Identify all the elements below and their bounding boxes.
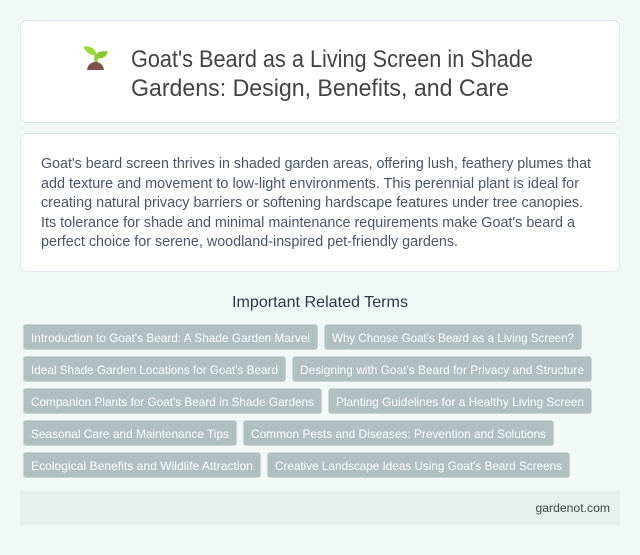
tag: companion plants: Companion Plants for Goat's Beard in Shade Gardens	[31, 395, 314, 409]
title: Gardens: Design, Benefits, and Care	[131, 75, 509, 102]
title	[131, 46, 533, 102]
icon: seedling	[84, 46, 108, 70]
text block: description: creating natural privacy barriers or softening hardscape features under tree canopies.	[41, 195, 583, 211]
tag: planting guidelines: Planting Guidelines for a Healthy Living Screen	[336, 395, 584, 409]
text block: description	[41, 156, 591, 250]
footer	[20, 491, 620, 525]
tag group: related terms	[24, 324, 592, 478]
tag: pests and diseases	[244, 420, 554, 446]
tag: planting guidelines	[328, 388, 592, 414]
tag: why choose: Why Choose Goat's Beard as a Living Screen?	[332, 331, 574, 345]
text block: description: perfect choice for serene, woodland-inspired pet-friendly gardens.	[41, 234, 458, 250]
tag: creative ideas: Creative Landscape Ideas Using Goat's Beard Screens	[275, 459, 562, 473]
tag: introduction: Introduction to Goat's Beard: A Shade Garden Marvel	[31, 331, 310, 345]
tag: introduction	[24, 324, 318, 350]
title: Goat's Beard as a Living Screen in Shade	[131, 46, 533, 73]
tag: why choose	[324, 324, 582, 350]
tag: ecological benefits: Ecological Benefits and Wildlife Attraction	[31, 459, 253, 473]
tag: creative ideas	[268, 452, 570, 478]
footer text: gardenot.com	[536, 501, 610, 515]
tag: seasonal care	[24, 420, 236, 446]
text block: description: Its tolerance for shade and minimal maintenance requirements make Goat's beard a	[41, 215, 575, 231]
panel: description	[20, 134, 620, 272]
tag: pests and diseases: Common Pests and Diseases: Prevention and Solutions	[251, 427, 546, 441]
tag: ecological benefits	[24, 452, 260, 478]
panel: title card	[20, 20, 620, 122]
text block: description: Goat's beard screen thrives in shaded garden areas, offering lush, feathery plumes that	[41, 156, 591, 172]
tag: companion plants	[24, 388, 322, 414]
heading: related terms: Important Related Terms	[232, 294, 408, 311]
text block: description: add texture and movement to low-light environments. This perennial plant is ideal for	[41, 176, 579, 192]
tag: ideal locations	[24, 356, 286, 382]
tag: ideal locations: Ideal Shade Garden Locations for Goat's Beard	[31, 363, 278, 377]
tag: designing: Designing with Goat's Beard for Privacy and Structure	[300, 363, 584, 377]
tag: designing	[292, 356, 592, 382]
tag: seasonal care: Seasonal Care and Maintenance Tips	[31, 427, 229, 441]
